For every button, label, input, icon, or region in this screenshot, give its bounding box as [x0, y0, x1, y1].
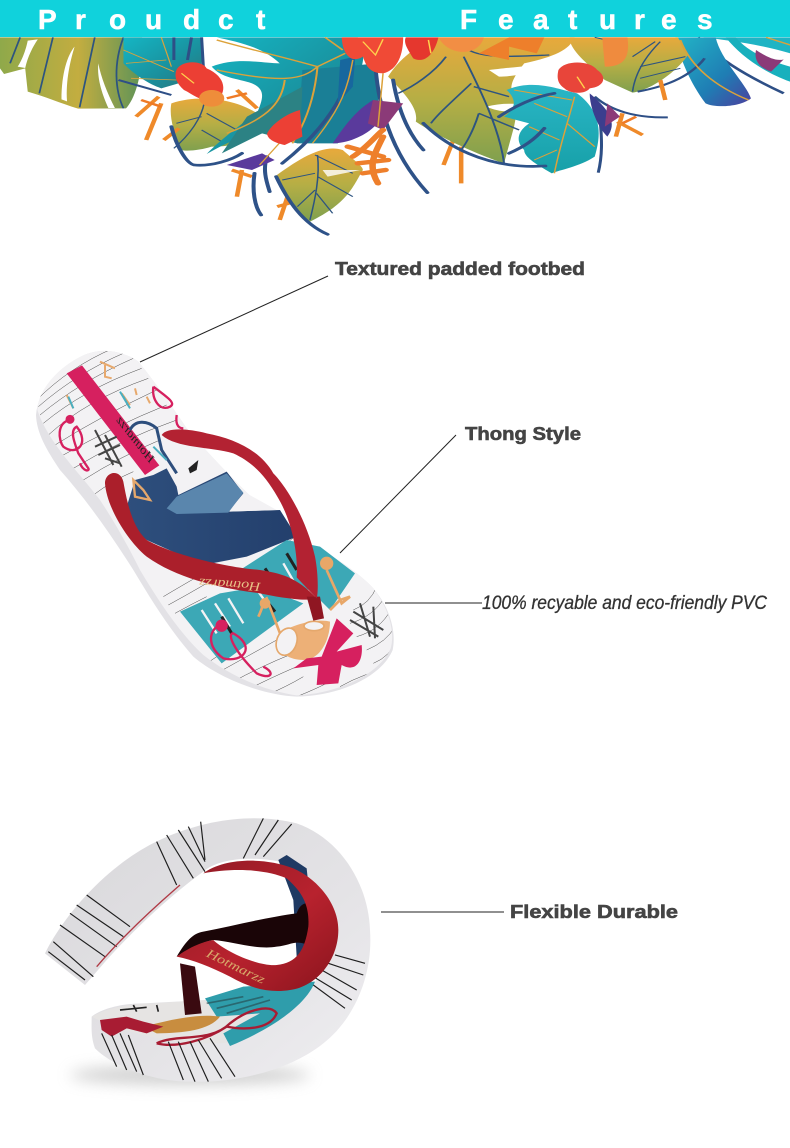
olive leaf bottom — [275, 148, 363, 222]
right olive leaf — [570, 37, 688, 93]
right blue leaf — [675, 37, 751, 106]
orange fern sprig — [348, 130, 388, 183]
gold strap logo: Hotmarzz — [203, 946, 267, 987]
red flowers — [175, 37, 628, 145]
label: 100% recyable and eco-friendly PVC: 100% recyable and eco-friendly PVC — [482, 593, 767, 614]
sharp symbols — [95, 430, 383, 638]
tropical leaves decoration — [0, 37, 790, 234]
big teal leaf — [207, 37, 378, 154]
stave lines — [37, 348, 397, 697]
red strap loop — [177, 861, 338, 991]
red straps — [105, 429, 324, 621]
teal fern right — [504, 85, 668, 173]
dark underside of strap — [177, 903, 317, 957]
black stripes on sole — [48, 818, 365, 1082]
callout line: flexible durable — [381, 911, 504, 913]
ground shadow — [70, 1065, 310, 1085]
callout line: PVC — [385, 602, 482, 604]
red curve print on sole edge — [97, 885, 180, 967]
fern leaf left — [123, 37, 202, 88]
label: Flexible Durable: Flexible Durable — [510, 901, 678, 922]
toe post — [180, 963, 202, 1015]
orange sprigs — [136, 80, 665, 220]
lower surface patterned area — [92, 982, 315, 1046]
teal notes — [68, 392, 167, 460]
blue footbed glimpse — [278, 855, 317, 957]
olive leaf center-left — [171, 99, 258, 151]
bar brand text: Hotmarzz — [113, 414, 157, 466]
navy graphic panel — [127, 422, 297, 565]
pink bow — [293, 618, 362, 685]
left big monstera leaf — [0, 37, 142, 109]
label: Textured padded footbed: Textured padded footbed — [335, 258, 585, 279]
small music notes — [67, 362, 150, 408]
banner title: Proudct Features: Features — [460, 4, 713, 35]
background banner — [0, 0, 790, 37]
dark blue and purple strands — [171, 57, 620, 234]
teal keyboard panels — [180, 540, 355, 663]
bent flip-flop product photo — [45, 818, 370, 1085]
orange horns — [258, 557, 350, 660]
far right teal leaves — [698, 37, 790, 93]
callout line: footbed — [140, 276, 328, 362]
label: Thong Style: Thong Style — [465, 423, 581, 444]
curled sole — [45, 818, 370, 1082]
flat flip-flop product photo — [36, 348, 397, 697]
sole side wall — [36, 351, 394, 697]
treble clefs — [60, 387, 271, 676]
callout line: thong style — [340, 435, 456, 553]
gold strap logo: Hotmarzz — [198, 576, 262, 594]
sole top surface — [37, 351, 392, 695]
pink brand bar — [67, 365, 159, 475]
orange monstera centre — [388, 37, 575, 163]
banner title: Proudct Features: Proudct — [38, 4, 265, 35]
